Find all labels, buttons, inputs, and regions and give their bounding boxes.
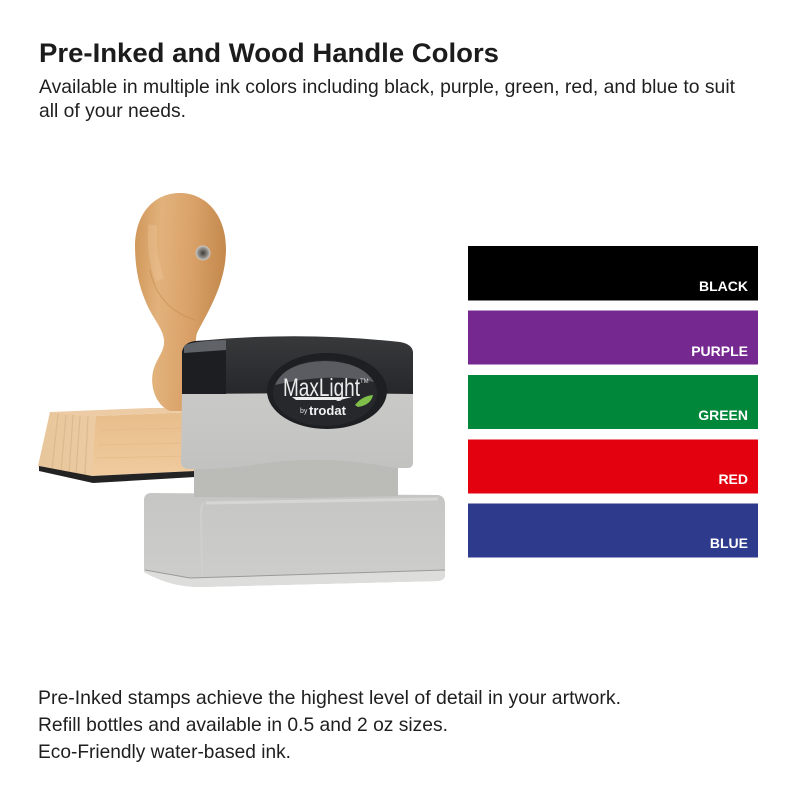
bottom text: Eco-Friendly water-based ink.	[38, 741, 291, 763]
base	[144, 493, 445, 587]
swatch: red	[468, 440, 758, 494]
bottom text	[38, 687, 621, 763]
logo oval	[267, 353, 387, 429]
metal pin	[196, 246, 210, 260]
title: Pre-Inked and Wood Handle Colors	[39, 38, 499, 68]
swatch: blue	[468, 504, 758, 558]
swatch: black	[468, 246, 758, 300]
swatch: red: RED	[718, 471, 748, 487]
logo oval: trodat	[309, 403, 347, 418]
pre-inked MaxLight stamp	[144, 336, 445, 587]
bottom text: Refill bottles and available in 0.5 and 2 oz sizes.	[38, 714, 448, 736]
logo text: MaxLight	[283, 374, 360, 402]
black pad	[39, 466, 195, 483]
intro text: all of your needs.	[39, 100, 186, 122]
swatch: purple: PURPLE	[691, 343, 748, 359]
intro text: Available in multiple ink colors including black, purple, green, red, and blue to suit	[39, 76, 736, 98]
wood handle stamp	[38, 193, 226, 483]
swatch: purple	[468, 310, 758, 364]
black cap	[182, 336, 413, 394]
logo oval: TM	[360, 379, 369, 385]
wooden handle	[135, 193, 226, 411]
gray body	[181, 392, 413, 469]
bottom text: Pre-Inked stamps achieve the highest level of detail in your artwork.	[38, 687, 621, 709]
swatch: black: BLACK	[699, 278, 748, 294]
swatch: blue: BLUE	[710, 535, 748, 551]
swatch: green	[468, 375, 758, 429]
neck	[194, 450, 398, 498]
swatch: green: GREEN	[698, 407, 748, 423]
color swatches	[468, 246, 758, 558]
intro text	[39, 76, 736, 122]
wooden block	[38, 408, 195, 483]
logo oval: by	[300, 408, 308, 415]
